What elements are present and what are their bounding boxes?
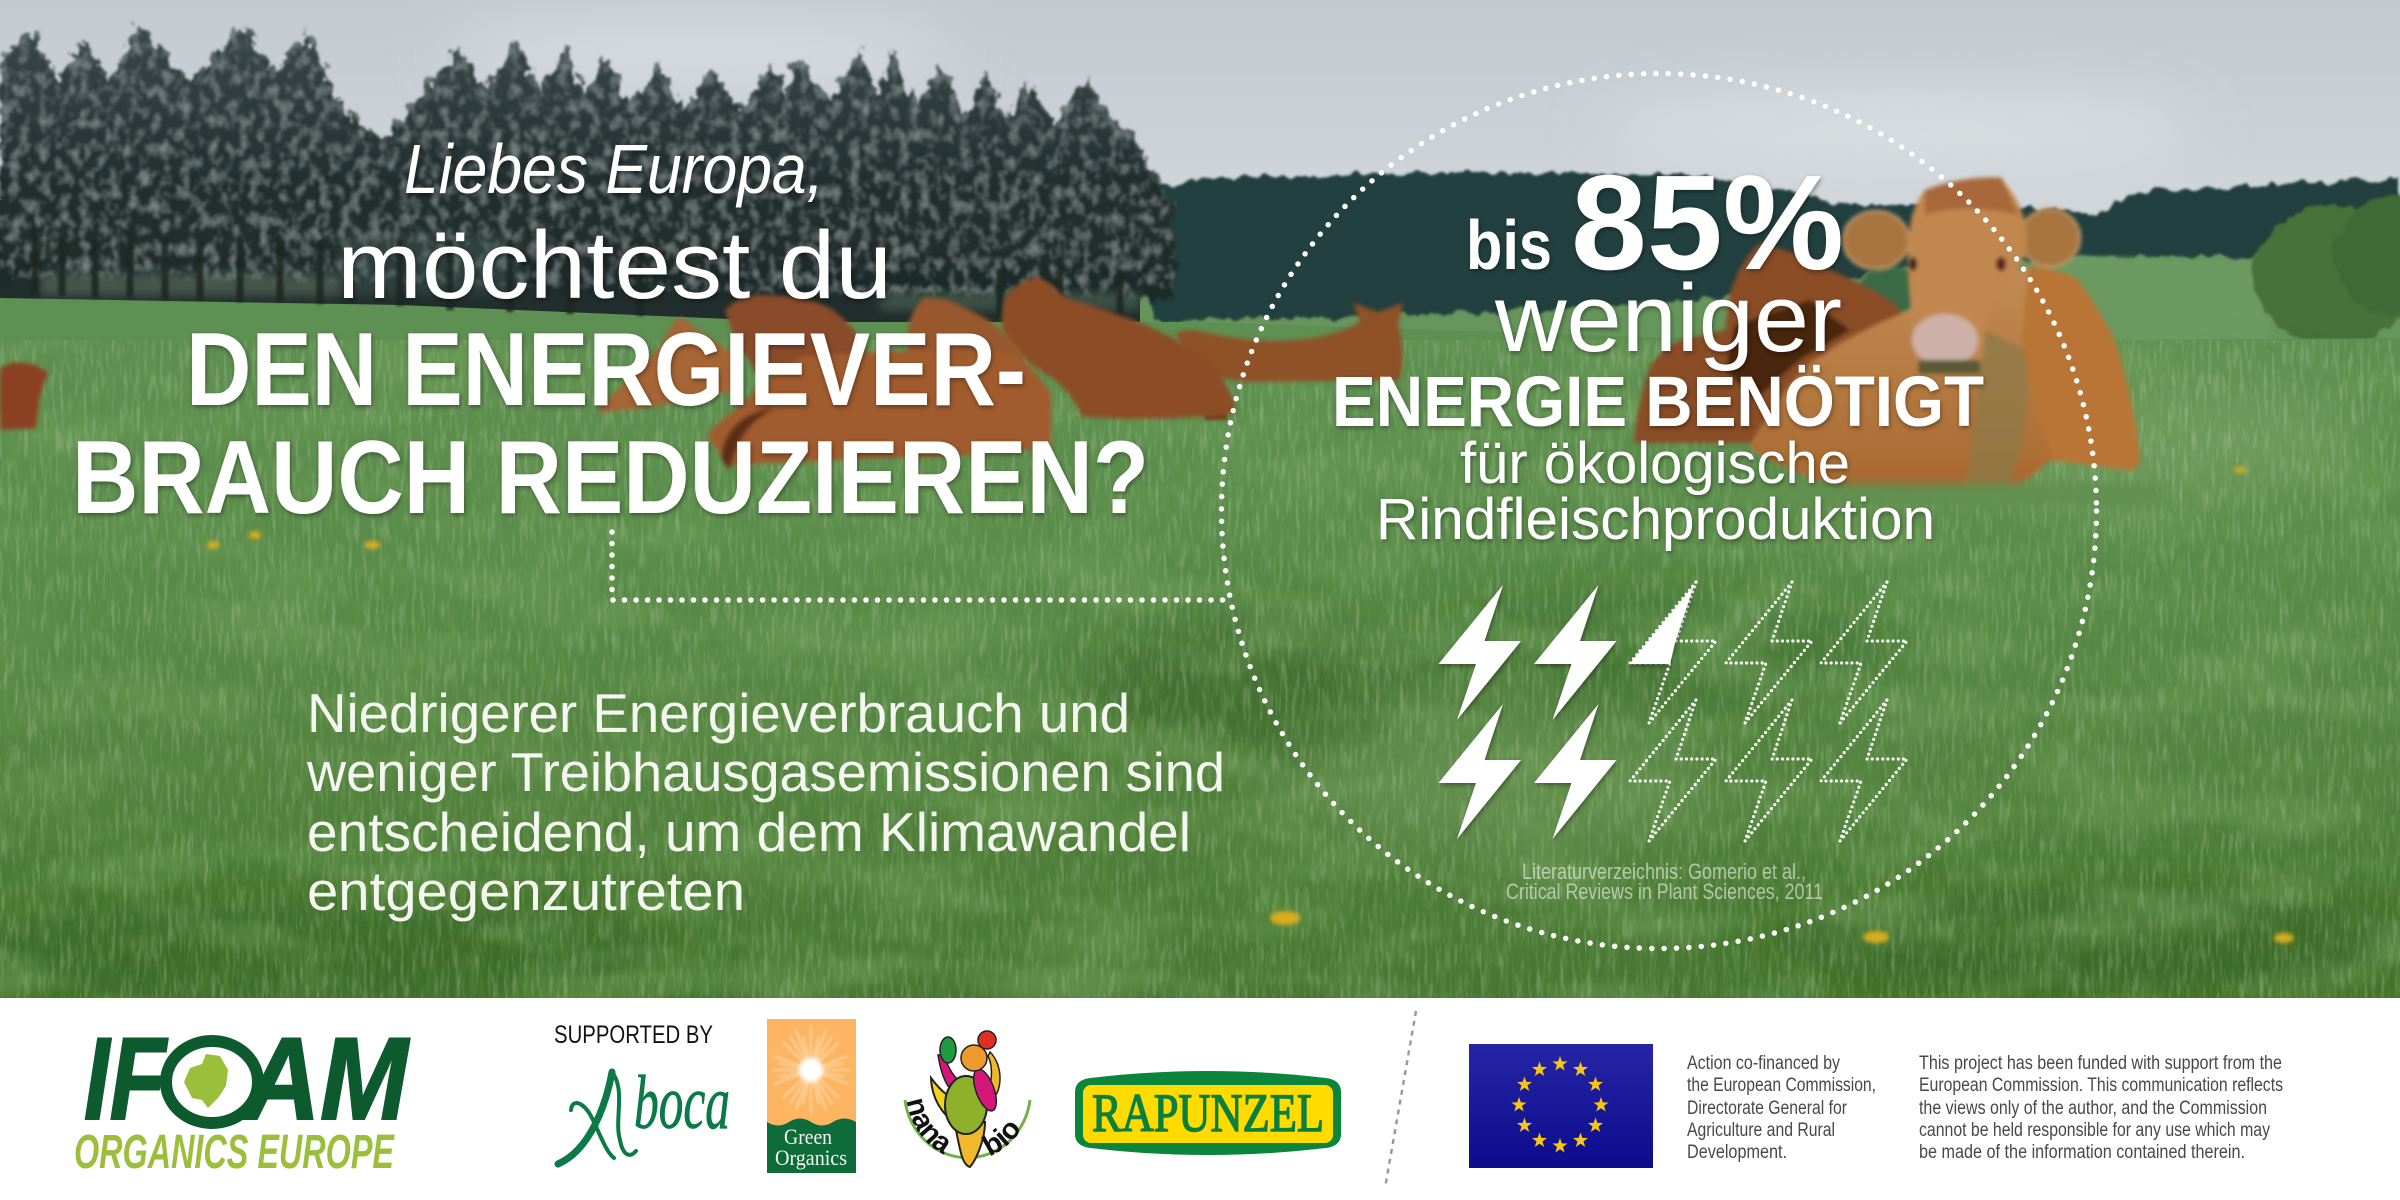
cow lying left D: [1002, 277, 1236, 419]
figure pink pear: [969, 1066, 1001, 1114]
heading: moechtest du: möchtest du: [337, 212, 892, 319]
text block: co-financing note: [1687, 1053, 1876, 1163]
logo wordmark left: IF: [84, 1013, 168, 1144]
sun rays: [772, 1026, 850, 1114]
cow I at edge: [0, 362, 48, 430]
icon: EU flag: [1469, 1044, 1653, 1168]
clouds: [440, 20, 2200, 165]
panel: dotted callout connector: [612, 74, 2096, 948]
dark bush behind main cow: [1860, 265, 1920, 315]
figure legs: [955, 1122, 985, 1167]
grass texture: [0, 340, 2400, 998]
cow G head: [908, 297, 1024, 372]
cow F back: [725, 295, 866, 372]
text block: disclaimer: the views only of the author, and the Commission: [1919, 1098, 2267, 1119]
broad field light and shade: [0, 380, 2400, 1000]
wordmark nana: nana: [906, 1098, 948, 1154]
main cow mouth shade: [1918, 360, 1980, 374]
statistic energie benoetigt: ENERGIE BENÖTIGT: [1332, 363, 1984, 442]
logo ring and globe: [166, 1041, 258, 1123]
cow B body: [1634, 243, 1912, 443]
figure head: [961, 1045, 987, 1071]
text block: disclaimer: [1919, 1053, 2283, 1163]
icon group: energy bolts: [1438, 582, 1907, 841]
footer background: [0, 998, 2400, 1200]
logo: Rapunzel: [1075, 1071, 1341, 1155]
distant forest right: [1150, 172, 2400, 322]
heading: brauch reduzieren: BRAUCH REDUZIEREN?: [72, 420, 1149, 536]
heading: den energiever-: DEN ENERGIEVER-: [186, 312, 1026, 428]
icon: filled white bolts: [1438, 585, 1694, 839]
text block: disclaimer: European Commission. This communication reflects: [1919, 1075, 2283, 1096]
tree base shade: [0, 200, 1178, 335]
logo: IFOAM Organics Europe: [74, 1013, 410, 1179]
cow at circle left edge: [1200, 368, 1228, 420]
text block: climate paragraph: entscheidend, um dem Klimawandel: [307, 801, 1191, 863]
heading: Liebes Europa: Liebes Europa,: [404, 130, 824, 208]
cow E foreground: [707, 351, 1051, 465]
main cow ears: [1843, 209, 2080, 269]
main cow head: [1908, 179, 2026, 367]
field: [0, 298, 2400, 998]
text block: disclaimer: This project has been funded with support from the: [1919, 1053, 2282, 1074]
footer divider: [1385, 1011, 1416, 1188]
cow B dark shadow: [1725, 300, 1850, 400]
main cow body: [1749, 267, 2140, 495]
logo: nana bio: [904, 1030, 1032, 1168]
statistic rindfleischproduktion: Rindfleischproduktion: [1376, 487, 1935, 552]
main cow forehead tuft: [1925, 178, 2018, 215]
cow H small: [596, 317, 738, 413]
statistic 85 percent: 85%: [1571, 147, 1844, 298]
text block: co-financing note: Agriculture and Rural: [1687, 1120, 1835, 1141]
main cow eyes: [1909, 257, 2006, 271]
main cow neck shade: [1964, 330, 2028, 493]
text block: co-financing note: the European Commission,: [1687, 1075, 1876, 1096]
brand wordmark: RAPUNZEL: [1092, 1083, 1324, 1143]
figure right arm: [985, 1052, 1000, 1100]
brand text: Organics: [775, 1145, 847, 1170]
brand text: [775, 1124, 847, 1170]
logo tagline: ORGANICS EUROPE: [74, 1126, 395, 1179]
bush right: [2253, 195, 2400, 345]
logo: Aboca: [558, 1061, 730, 1164]
dotted connector line: [612, 532, 1225, 600]
text block: literature reference: Critical Reviews in Plant Sciences, 2011: [1506, 879, 1823, 904]
grass tufts over cows: [1740, 484, 2160, 506]
green field: [767, 1118, 856, 1173]
text block: co-financing note: Action co-financed by: [1687, 1053, 1840, 1074]
text block: climate paragraph: [306, 682, 1225, 922]
statistic fuer oekologische: für ökologische: [1460, 431, 1850, 496]
text block: co-financing note: Development.: [1687, 1142, 1787, 1163]
heading block: [72, 130, 1149, 536]
wordmark bio: bio: [981, 1122, 1019, 1156]
cow B behind main: [1634, 243, 1912, 443]
text block: climate paragraph: weniger Treibhausgasemissionen sind: [306, 741, 1225, 803]
panel: circle statistic text: [1332, 147, 1984, 552]
text block: climate paragraph: entgegenzutreten: [307, 860, 745, 922]
sky: [0, 0, 2400, 345]
sun core: [799, 1058, 823, 1082]
flag stars: [1511, 1056, 1609, 1152]
main cow: [1749, 178, 2140, 495]
orange field: [767, 1019, 856, 1127]
logo wordmark right: AM: [241, 1013, 410, 1144]
tree line left: [0, 23, 1176, 300]
yellow inner badge: [1083, 1085, 1333, 1143]
figure pink arm: [938, 1055, 965, 1095]
outer badge: [1075, 1071, 1341, 1155]
main cow muzzle: [1912, 314, 1978, 366]
juggled pear: [940, 1037, 956, 1063]
text block: climate paragraph: Niedrigerer Energieverbrauch und: [307, 682, 1130, 744]
icon: dotted outline bolts: [1630, 582, 1907, 841]
dotted circle: [1222, 74, 2096, 948]
green hill: [1880, 256, 2270, 345]
statistic weniger: weniger: [1494, 265, 1842, 372]
text block: literature reference: [1506, 859, 1823, 904]
text block: literature reference: Literaturverzeichnis: Gomerio et al.,: [1522, 859, 1806, 884]
arc path wordmark nana: [906, 1090, 1032, 1160]
brand text: Green: [784, 1124, 832, 1149]
statistic prefix: bis: [1466, 206, 1552, 284]
midground green band: [1140, 240, 2400, 350]
tree trunk zone: [35, 230, 1140, 316]
juggled apple: [978, 1031, 996, 1049]
figure left arm: [931, 1078, 962, 1122]
text block: co-financing note: Directorate General for: [1687, 1098, 1848, 1119]
supported by label: SUPPORTED BY: [554, 1021, 713, 1049]
panel: footer: [0, 998, 2400, 1184]
grass arc: [905, 1100, 1030, 1158]
main cow right side: [2020, 267, 2140, 471]
cow E tail shade: [722, 408, 775, 470]
far cow right: [1176, 303, 1403, 382]
figure body: [945, 1076, 987, 1134]
flag field: [1469, 1044, 1653, 1168]
text block: disclaimer: cannot be held responsible for any use which may: [1919, 1120, 2270, 1141]
logo: Green Organics: [767, 1019, 856, 1173]
dandelions: [207, 467, 2294, 943]
text block: disclaimer: be made of the information contained therein.: [1919, 1142, 2245, 1163]
Aboca word: boca: [634, 1061, 730, 1145]
Aboca swoosh: [558, 1072, 636, 1164]
